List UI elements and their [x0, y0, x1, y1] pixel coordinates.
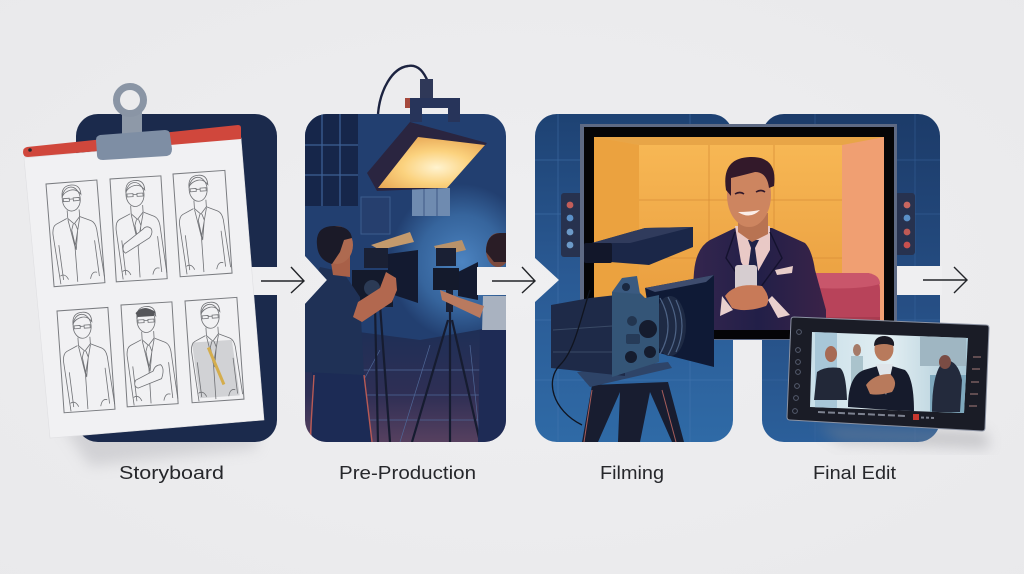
- head: [333, 226, 353, 264]
- sketch panel 2: [110, 176, 167, 282]
- connector strip 2: [477, 267, 508, 295]
- tripod: [582, 382, 684, 442]
- tablet icons: [793, 330, 801, 413]
- sketch panel 1: [46, 180, 105, 287]
- panel: storyboard backing: [76, 114, 277, 442]
- spotlight glow: [378, 137, 485, 188]
- eyes: [735, 190, 765, 194]
- left control strip: [561, 193, 583, 257]
- neck: [330, 256, 350, 277]
- phone: [735, 265, 757, 292]
- light cable: [378, 66, 428, 114]
- softbox 2: [458, 262, 478, 300]
- clip stem: [122, 112, 142, 136]
- light spill on wall: [396, 190, 506, 334]
- hair: [725, 157, 774, 196]
- camera cable: [552, 290, 590, 425]
- connector strip 3: [890, 266, 942, 295]
- sketch panel 6: [185, 297, 244, 403]
- softbox flag 2: [434, 240, 466, 252]
- paper shadow: [62, 410, 258, 466]
- infographic: video production workflow: [23, 64, 994, 483]
- windows: [305, 114, 358, 206]
- step 1: storyboard: [23, 86, 280, 466]
- lead presenter: [848, 364, 914, 412]
- camera ridges: [553, 326, 612, 352]
- panel: pre-production scene: [305, 114, 506, 442]
- person left: [814, 368, 847, 400]
- monitor frame: [580, 124, 897, 340]
- red clipboard bar: [23, 125, 241, 157]
- camera body rear: [551, 294, 625, 376]
- tripod head: [577, 362, 672, 387]
- head: [727, 163, 771, 227]
- softbox 1: [388, 250, 418, 303]
- tablet timeline: [818, 412, 905, 416]
- arm: [353, 272, 397, 322]
- sketch panel 4: [57, 307, 115, 413]
- bar hole: [28, 148, 32, 152]
- person back: [853, 344, 861, 356]
- tablet right ticks: [969, 357, 981, 406]
- viewfinder: [584, 243, 612, 263]
- clip ring: [116, 86, 144, 114]
- connector strip 1: [250, 267, 280, 295]
- camera top box: [592, 227, 693, 265]
- pocket square: [775, 266, 793, 275]
- arrow 1: [261, 267, 304, 293]
- camera controls: [625, 316, 657, 363]
- hair: [317, 226, 352, 264]
- sketch frames: [46, 170, 244, 413]
- cuffs: [720, 296, 790, 318]
- camera 1: [352, 248, 393, 307]
- neck: [738, 213, 768, 242]
- operator right: [440, 233, 510, 442]
- poster: [361, 197, 390, 234]
- background columns: [815, 332, 837, 412]
- back window: [412, 188, 450, 216]
- person right: [932, 360, 962, 412]
- floor tiles: [364, 345, 480, 442]
- panel seams: [639, 145, 842, 258]
- hands: [725, 285, 768, 310]
- sketch panel 5: [121, 302, 178, 407]
- clip clamp: [96, 130, 172, 160]
- tripods: [375, 300, 480, 442]
- arrow 3: [923, 267, 967, 293]
- panel: final edit background: [762, 114, 940, 442]
- lens hood: [645, 275, 714, 367]
- lapel lines: [726, 232, 782, 290]
- tablet screen: [810, 332, 968, 413]
- step 3 and 4: filming and final edit: [535, 114, 990, 448]
- tablet: [787, 317, 989, 431]
- smile: [738, 210, 760, 216]
- right control strip: [895, 193, 915, 255]
- step 2: pre-production: [305, 64, 506, 442]
- camera top handle: [612, 276, 640, 294]
- red seat: [815, 273, 880, 317]
- presenter: [690, 157, 826, 330]
- softbox flag 1: [371, 232, 414, 250]
- tie: [748, 240, 759, 273]
- label: Storyboard: Storyboard: [119, 462, 224, 483]
- operator left: [305, 226, 397, 442]
- pants: [312, 372, 372, 442]
- spotlight housing: [367, 122, 487, 191]
- tablet shadow: [815, 425, 990, 448]
- lens: [654, 296, 686, 356]
- shirt: [305, 267, 364, 375]
- storyboard paper: [24, 138, 264, 438]
- camera body front: [612, 290, 659, 377]
- floor: [305, 325, 506, 442]
- side walls: [620, 142, 639, 286]
- label: Final Edit: Final Edit: [813, 462, 896, 483]
- shirt: [735, 226, 770, 272]
- film camera: [551, 227, 714, 442]
- studio back wall: [594, 137, 884, 145]
- monitor bezel: [584, 127, 894, 339]
- top strip: [642, 137, 884, 145]
- label: Pre-Production: Pre-Production: [339, 462, 476, 483]
- light mount: [405, 79, 460, 122]
- camera 2: [433, 248, 459, 312]
- sketch panel 3: [173, 170, 232, 277]
- monitor scene: [594, 137, 884, 330]
- tablet record badge: [913, 414, 919, 420]
- suit: [690, 228, 826, 330]
- arrow 2: [492, 267, 535, 293]
- back wall: [305, 114, 506, 354]
- panel: filming background: [535, 114, 733, 442]
- label: Filming: Filming: [600, 462, 664, 483]
